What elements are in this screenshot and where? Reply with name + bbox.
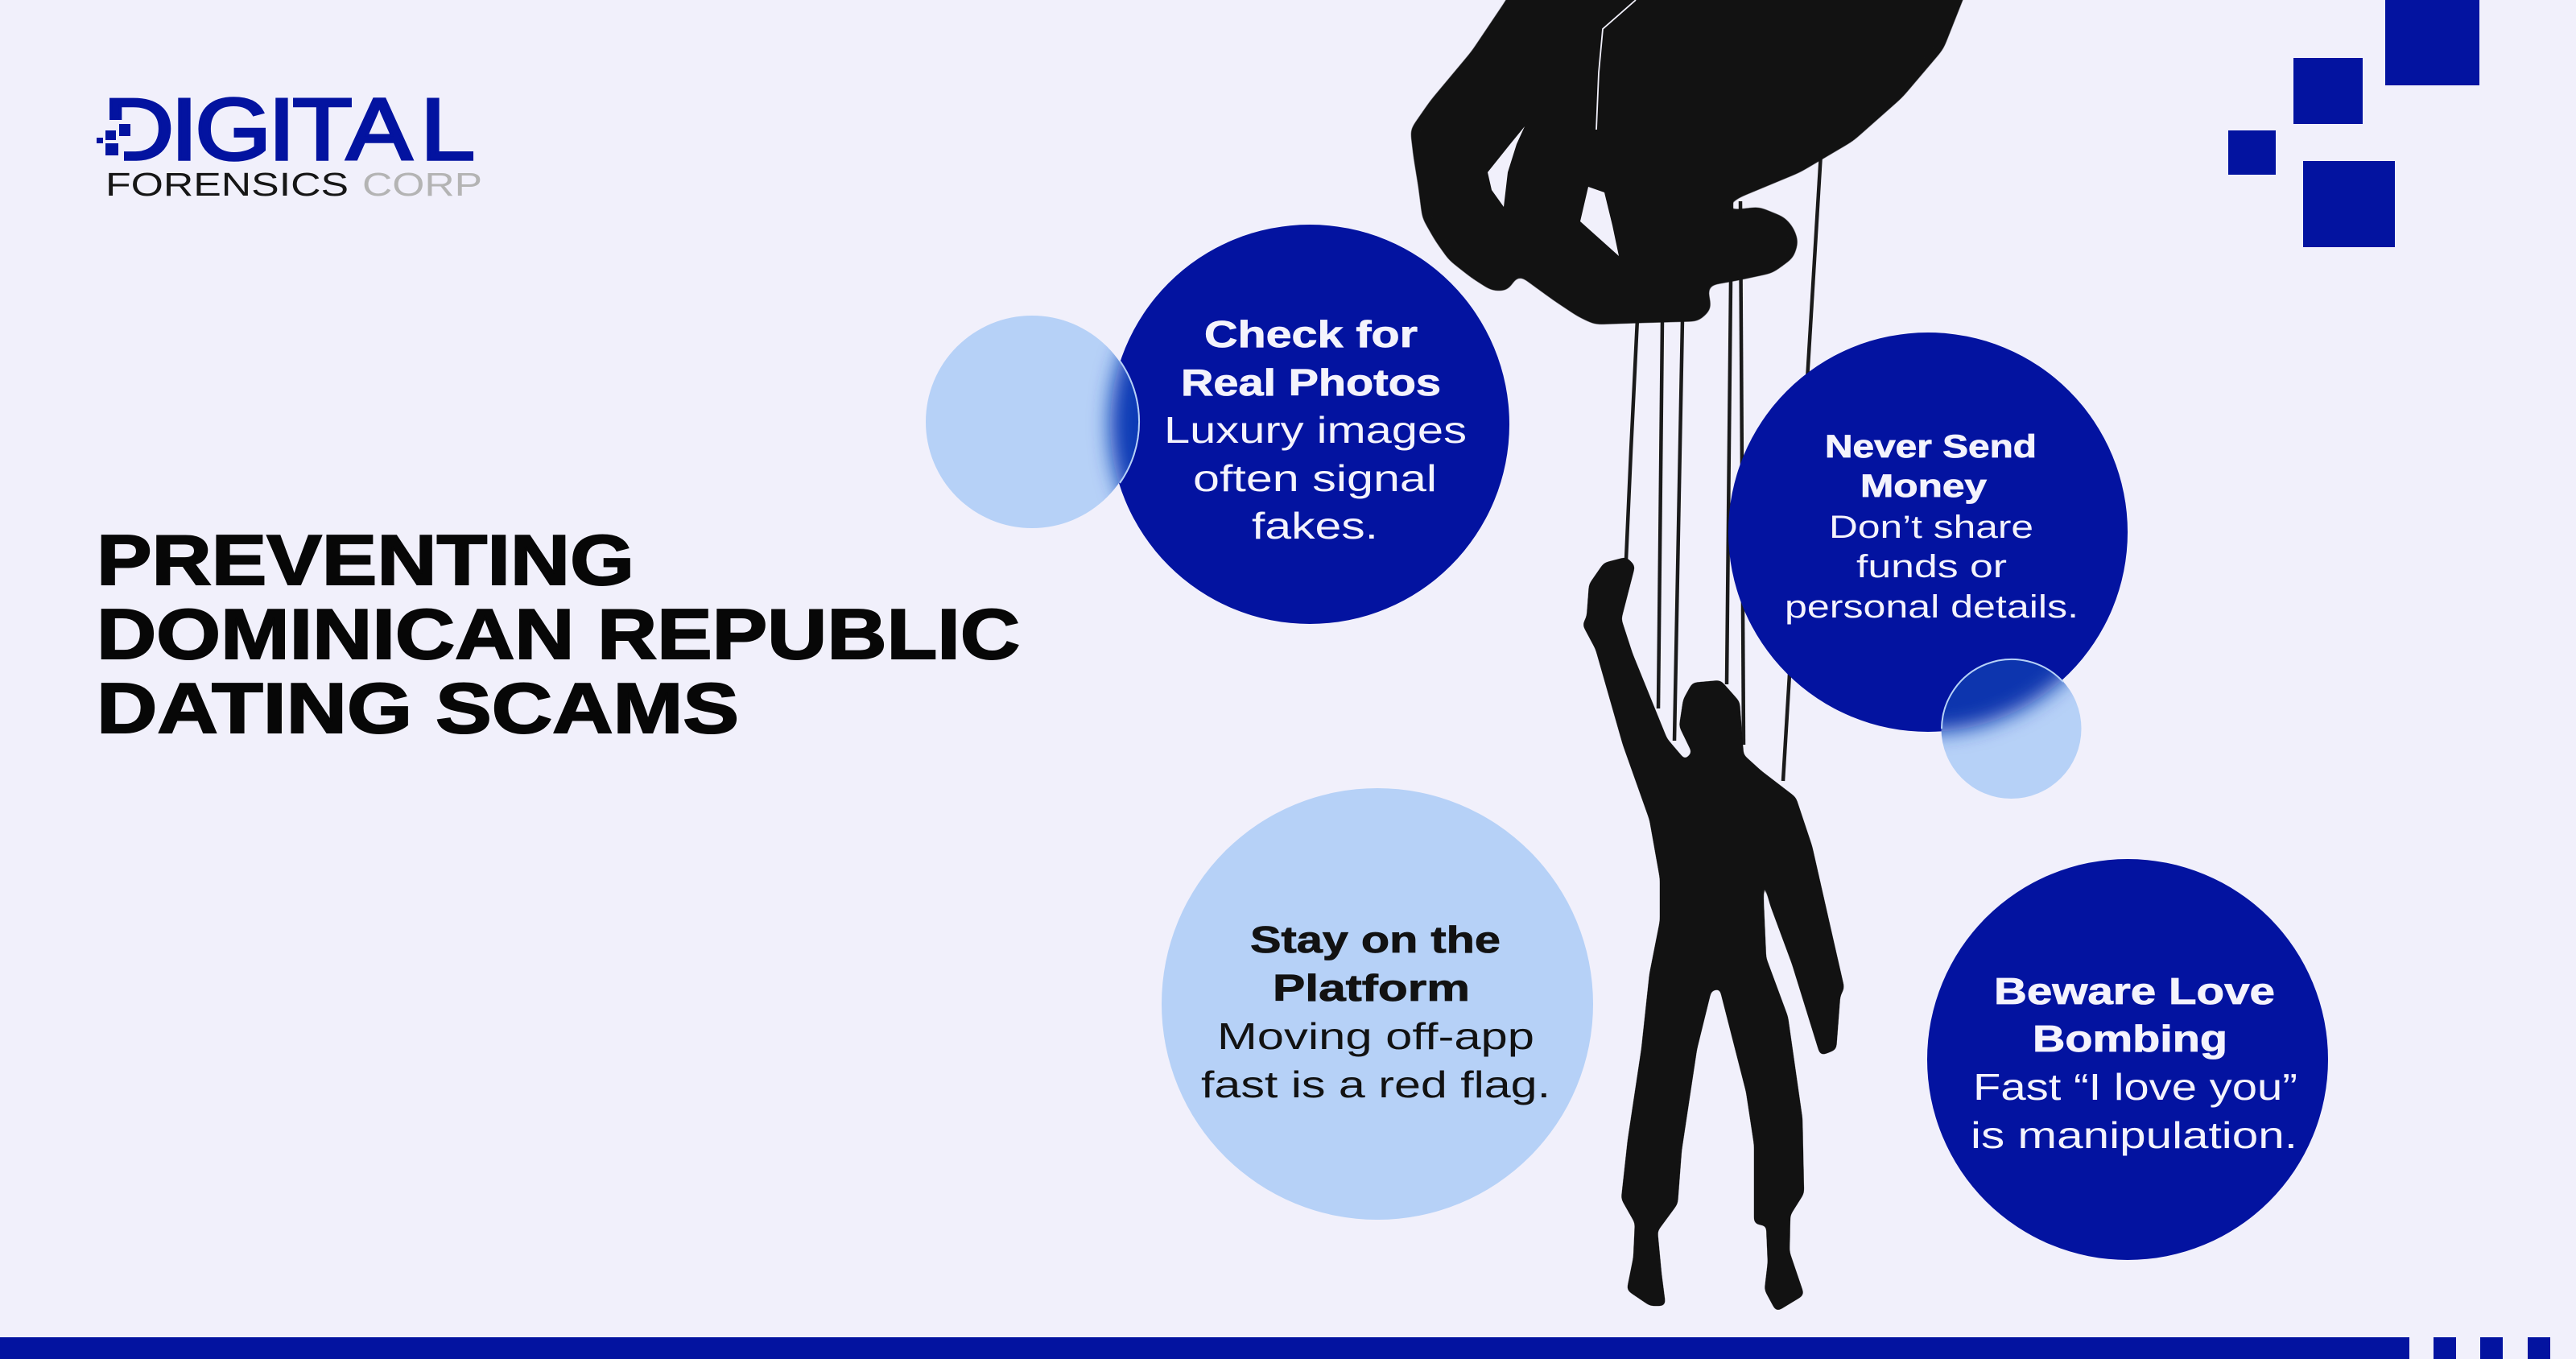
circle: Check for Real Photos: Luxury images [1164,409,1467,451]
title [97,520,1020,748]
circle: Stay on the Platform: Platform [1273,967,1470,1009]
silhouette: marionette figure [1583,558,1843,1311]
glass circle overlapping Check for Real Photos [926,316,1140,528]
circle: Beware Love Bombing: Fast “I love you” [1973,1066,2297,1108]
title: PREVENTING [97,520,634,600]
circle: Stay on the Platform: Stay on the [1250,919,1501,960]
circle: Stay on the Platform [1162,788,1593,1220]
circle: Beware Love Bombing: Beware Love [1994,970,2275,1012]
circle: Never Send Money [1728,333,2128,732]
circle: Beware Love Bombing: is manipulation. [1971,1114,2297,1156]
silhouette: puppeteer hand [1410,0,1975,324]
footer bar with squares [0,1337,2550,1359]
logo: Digital Forensics Corp: DIGITAL [103,80,475,179]
circle: Check for Real Photos: Check for [1204,313,1418,355]
circle: Check for Real Photos [1110,225,1509,624]
logo: Digital Forensics Corp: FORENSICS [105,166,349,203]
circle: Check for Real Photos: often signal [1193,457,1437,499]
glass circle overlapping Never Send Money [1941,659,2082,799]
title: DATING SCAMS [97,668,739,748]
logo: Digital Forensics Corp: CORP [362,166,482,203]
circle: Check for Real Photos: fakes. [1252,505,1378,547]
circle: Stay on the Platform: Moving off-app [1217,1015,1534,1057]
decorative squares top right [2228,0,2479,247]
circle: Beware Love Bombing: Bombing [2033,1018,2227,1060]
circle: Never Send Money: Don’t share [1829,510,2033,545]
title: DOMINICAN REPUBLIC [97,594,1020,674]
puppet strings [1626,153,1821,781]
circle: Beware Love Bombing [1927,859,2328,1260]
circle: Never Send Money: Never Send [1825,429,2037,465]
circle: Never Send Money: Money [1860,469,1988,504]
circle: Never Send Money: funds or [1856,549,2007,584]
circle: Check for Real Photos: Real Photos [1181,361,1441,403]
circle: Stay on the Platform: fast is a red flag. [1201,1064,1550,1105]
circle: Never Send Money: personal details. [1785,589,2079,625]
